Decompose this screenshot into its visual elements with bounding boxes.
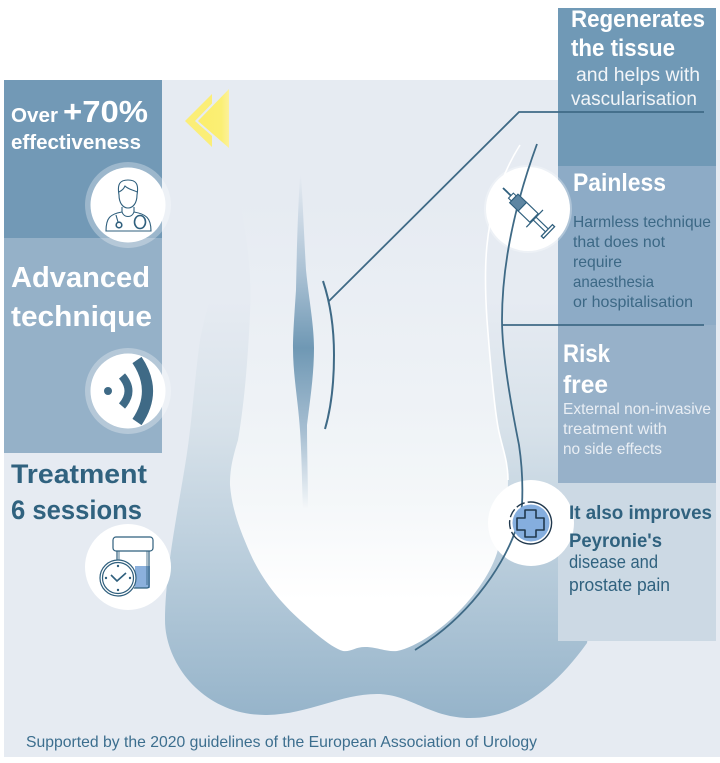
text: treatment 6 sessions: 6 sessions [11,495,142,525]
central channel [293,175,314,508]
text: painless: that does not [573,234,666,251]
text: regenerates the tissue: Regenerates [571,6,705,33]
callout lines [323,112,704,650]
arc next to central channel [323,281,334,429]
panel: over 70% effectiveness: +70% [63,94,148,129]
text: regenerates the tissue: the tissue [571,35,675,62]
text: also improves: It also improves [569,503,712,524]
text: risk free: External non-invasive [563,401,711,418]
text: regenerates the tissue: and helps with [576,65,700,86]
footer text: Supported by the 2020 guidelines of the European Association of Urology [26,734,537,751]
text: painless [573,169,711,311]
text: treatment 6 sessions: Treatment [11,459,147,489]
long contour line [415,144,537,650]
panel: advanced technique: technique [11,301,152,333]
text: also improves: disease and [569,552,658,572]
text: risk free: no side effects [563,441,662,458]
text: also improves [569,503,712,595]
icon: syringe [495,179,557,241]
leader line to risk free panel [502,324,704,326]
panel: advanced technique: Advanced [11,262,150,294]
inner white shape [230,145,520,651]
panel: over 70% effectiveness: effectiveness [11,132,141,154]
icon: shockwave signal [85,348,171,434]
icon: medical plus [510,502,552,544]
icon: syringe background [484,165,572,253]
white edge highlight [486,145,520,480]
text: also improves: Peyronie's [569,531,662,552]
outer body shape [165,200,600,718]
anatomy illustration [165,145,600,718]
panel: over 70% effectiveness [4,80,162,238]
icon: jar with clock [85,524,171,610]
text: regenerates the tissue [571,6,705,110]
panel: regenerates background [558,8,716,166]
text: painless: Harmless technique [573,214,711,231]
icon: doctor [85,162,171,248]
panel: painless background [558,166,716,325]
heading: over +70%: Over [11,105,58,127]
text: painless: require [573,254,622,271]
text: risk free: Risk [563,340,610,368]
panel: risk free background [558,325,716,483]
icon: plus background [488,480,574,566]
text: painless: Painless [573,169,666,197]
text: treatment 6 sessions [11,459,147,525]
text: regenerates the tissue: vascularisation [571,89,697,110]
panel: also improves background [558,483,716,641]
text: risk free: treatment with [563,421,667,438]
text: risk free: free [563,371,608,399]
text: painless: or hospitalisation [573,294,693,311]
panel: advanced technique [4,238,162,453]
text: risk free [563,340,711,458]
leader line to regenerates panel [329,112,704,301]
text: also improves: prostate pain [569,575,670,595]
text: painless: anaesthesia [573,274,654,291]
icon: yellow chevrons [185,86,229,151]
